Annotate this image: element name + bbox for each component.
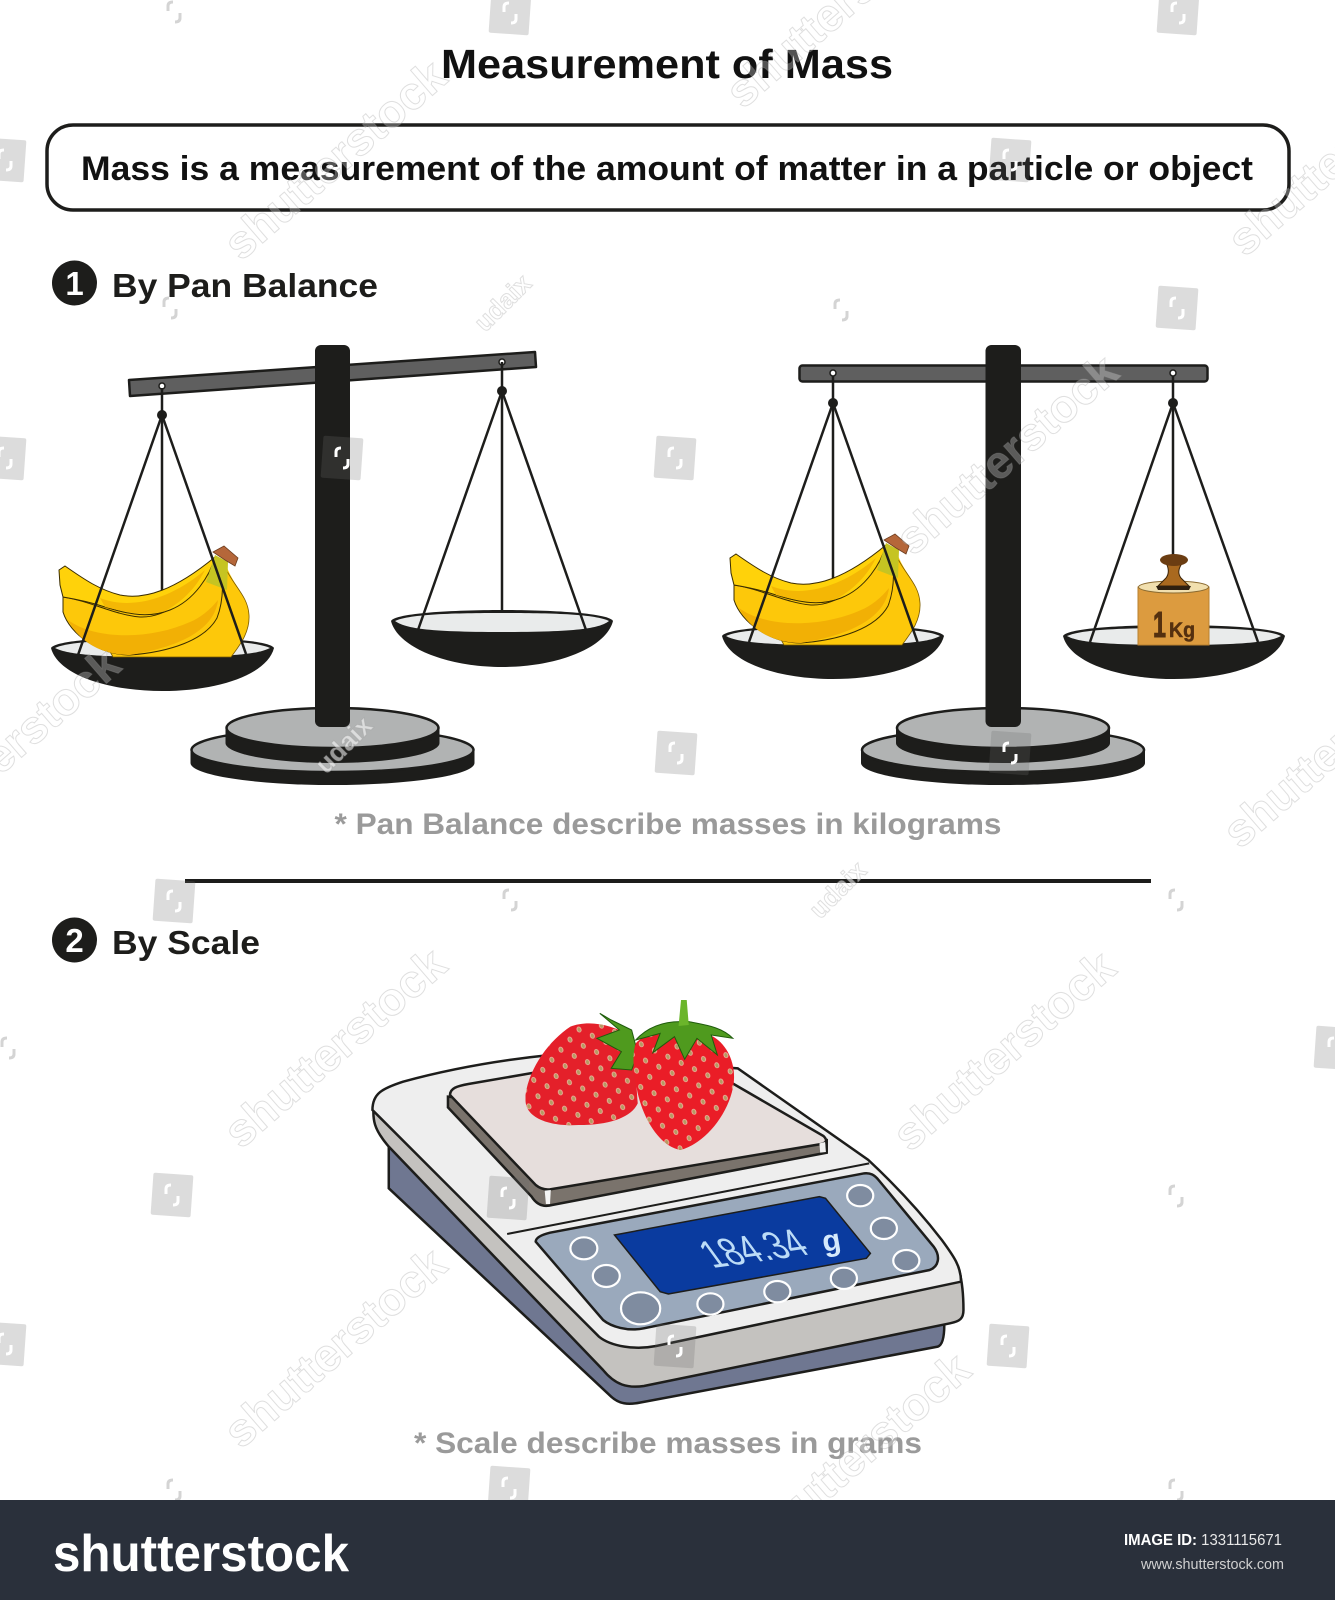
control panel (536, 1173, 938, 1329)
beam (800, 366, 1208, 382)
heading: by scale: 2 (65, 922, 84, 959)
watermarks: shutterstock (882, 940, 1125, 1161)
weight: Kg (1169, 619, 1195, 642)
watermarks: shutterstock (885, 344, 1128, 565)
website: www.shutterstock.com (1140, 1556, 1284, 1573)
scale base (389, 1147, 944, 1404)
bananas (59, 546, 249, 657)
lcd display (614, 1197, 870, 1294)
scale body side (373, 1100, 963, 1387)
bananas (730, 534, 920, 645)
left pan balance: unbalanced (51, 345, 613, 785)
title: Measurement of Mass (441, 41, 893, 87)
watermarks: shutterstock (213, 1237, 456, 1458)
watermarks: shutterstock (213, 49, 456, 270)
beam (129, 352, 536, 396)
watermarks: shutterstock (737, 1342, 980, 1563)
heading: by pan balance: By Pan Balance (112, 267, 378, 304)
weight (1138, 554, 1209, 645)
right pan with 1 kg weight (1063, 376, 1285, 679)
post (315, 345, 350, 727)
display reading: 184.34 (689, 1221, 818, 1277)
left pan with bananas (722, 376, 944, 679)
watermarks: udaix (803, 855, 873, 924)
post (986, 345, 1021, 727)
footer bar (0, 1500, 1335, 1600)
right pan balance: balanced (722, 345, 1285, 785)
footer logo: shutterstock (53, 1525, 349, 1583)
strawberries (526, 1000, 734, 1150)
heading: by scale (52, 918, 260, 962)
watermarks: udaix (468, 268, 538, 337)
watermarks: udaix (309, 710, 379, 779)
heading: by pan balance (52, 260, 378, 306)
base (190, 708, 474, 785)
digital scale with strawberries (372, 1000, 963, 1404)
note: pan balance: * Pan Balance describe masses in kilograms (334, 808, 1002, 841)
right pan empty (391, 362, 613, 667)
weight: 1 (1153, 604, 1166, 645)
display reading: g (819, 1223, 843, 1259)
image id: IMAGE ID: 1331115671 (1124, 1532, 1282, 1549)
heading: by scale: By Scale (112, 924, 260, 961)
watermarks: shutterstock (213, 937, 456, 1158)
base (861, 708, 1145, 785)
definition box: Mass is a measurement of the amount of matter in a particle or object (81, 150, 1253, 188)
heading: by pan balance: 1 (65, 265, 84, 302)
left pan with bananas (51, 388, 274, 691)
definition box (47, 125, 1289, 210)
scale top surface (372, 1055, 961, 1348)
weighing plate (448, 1071, 827, 1206)
note: scale: * Scale describe masses in grams (414, 1427, 922, 1460)
